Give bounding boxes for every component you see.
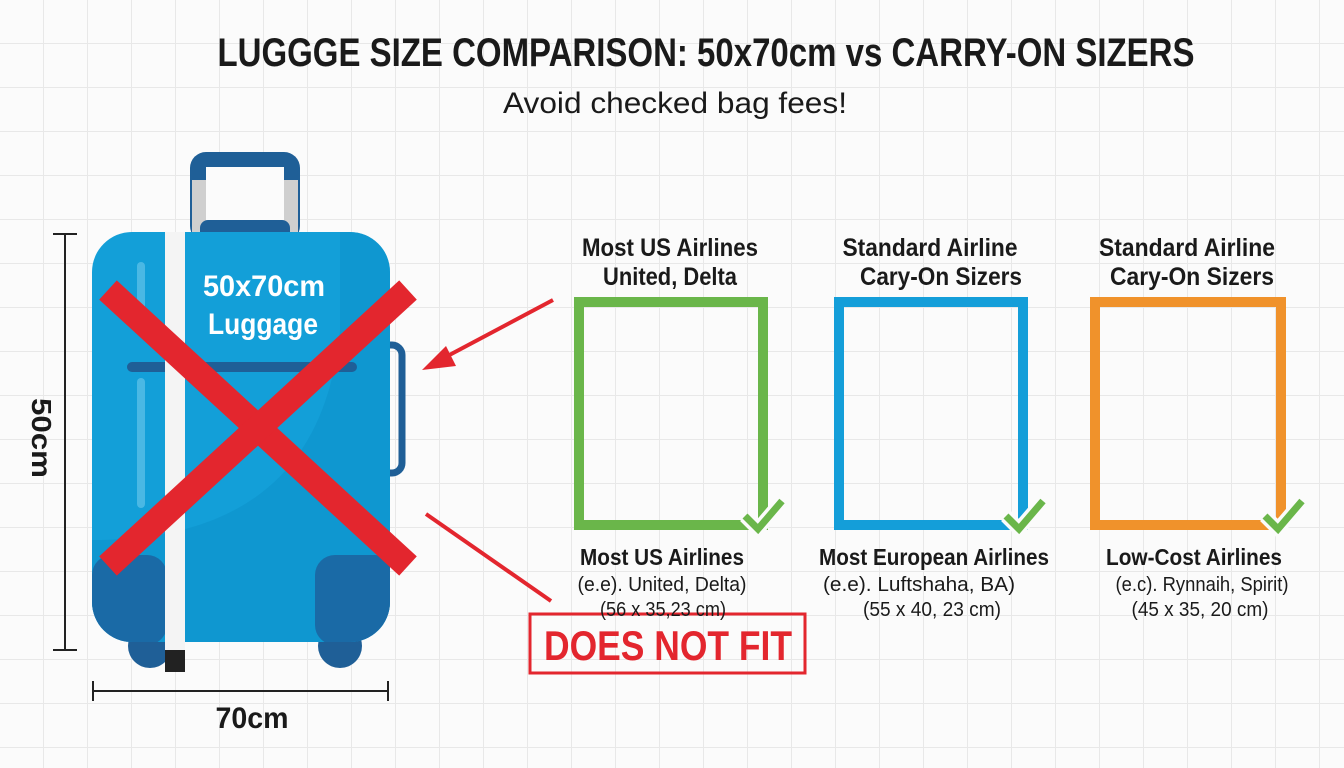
sizer: Europe: Most European Airlines bbox=[819, 544, 1049, 570]
suitcase: Luggage bbox=[208, 308, 318, 341]
arrow bbox=[422, 300, 553, 370]
sizer: US bbox=[578, 234, 782, 621]
sizer: US: (e.e). United, Delta) bbox=[578, 574, 746, 596]
suitcase label: 50x70cm bbox=[203, 270, 325, 303]
sizer: Europe: (55 x 40, 23 cm) bbox=[863, 599, 1001, 621]
dimension width bbox=[93, 681, 388, 701]
sizer: low-cost: Standard Airline bbox=[1099, 234, 1275, 262]
sizer: US: Most US Airlines bbox=[582, 234, 758, 262]
70cm label: 70cm bbox=[216, 702, 288, 735]
does not fit stamp: DOES NOT FIT bbox=[544, 622, 792, 669]
sizer: low-cost bbox=[1095, 234, 1302, 621]
sizer: US: Most US Airlines bbox=[580, 544, 744, 570]
suitcase bbox=[92, 152, 402, 672]
sizer: Europe: Cary-On Sizers bbox=[860, 263, 1022, 291]
dimension height bbox=[53, 234, 77, 650]
sizer: Europe: (e.e). Luftshaha, BA) bbox=[823, 574, 1015, 596]
red X bbox=[108, 290, 408, 566]
sizer: Europe: Standard Airline bbox=[842, 234, 1018, 262]
tape measure bbox=[165, 232, 185, 652]
sizer: low-cost: Cary-On Sizers bbox=[1110, 263, 1274, 291]
sizer: US: United, Delta bbox=[603, 263, 738, 291]
sizer: Europe bbox=[819, 234, 1049, 621]
subtitle: Avoid checked bag fees! bbox=[503, 87, 847, 120]
sizer: low-cost: (45 x 35, 20 cm) bbox=[1132, 599, 1268, 621]
sizer: low-cost: (e.c). Rynnaih, Spirit) bbox=[1116, 574, 1288, 596]
sizer: low-cost: Low-Cost Airlines bbox=[1106, 544, 1282, 570]
arrow line bbox=[426, 514, 551, 601]
sizer: US: (56 x 35,23 cm) bbox=[600, 599, 726, 621]
50cm label: 50cm bbox=[26, 398, 57, 478]
does not fit stamp bbox=[530, 614, 805, 673]
